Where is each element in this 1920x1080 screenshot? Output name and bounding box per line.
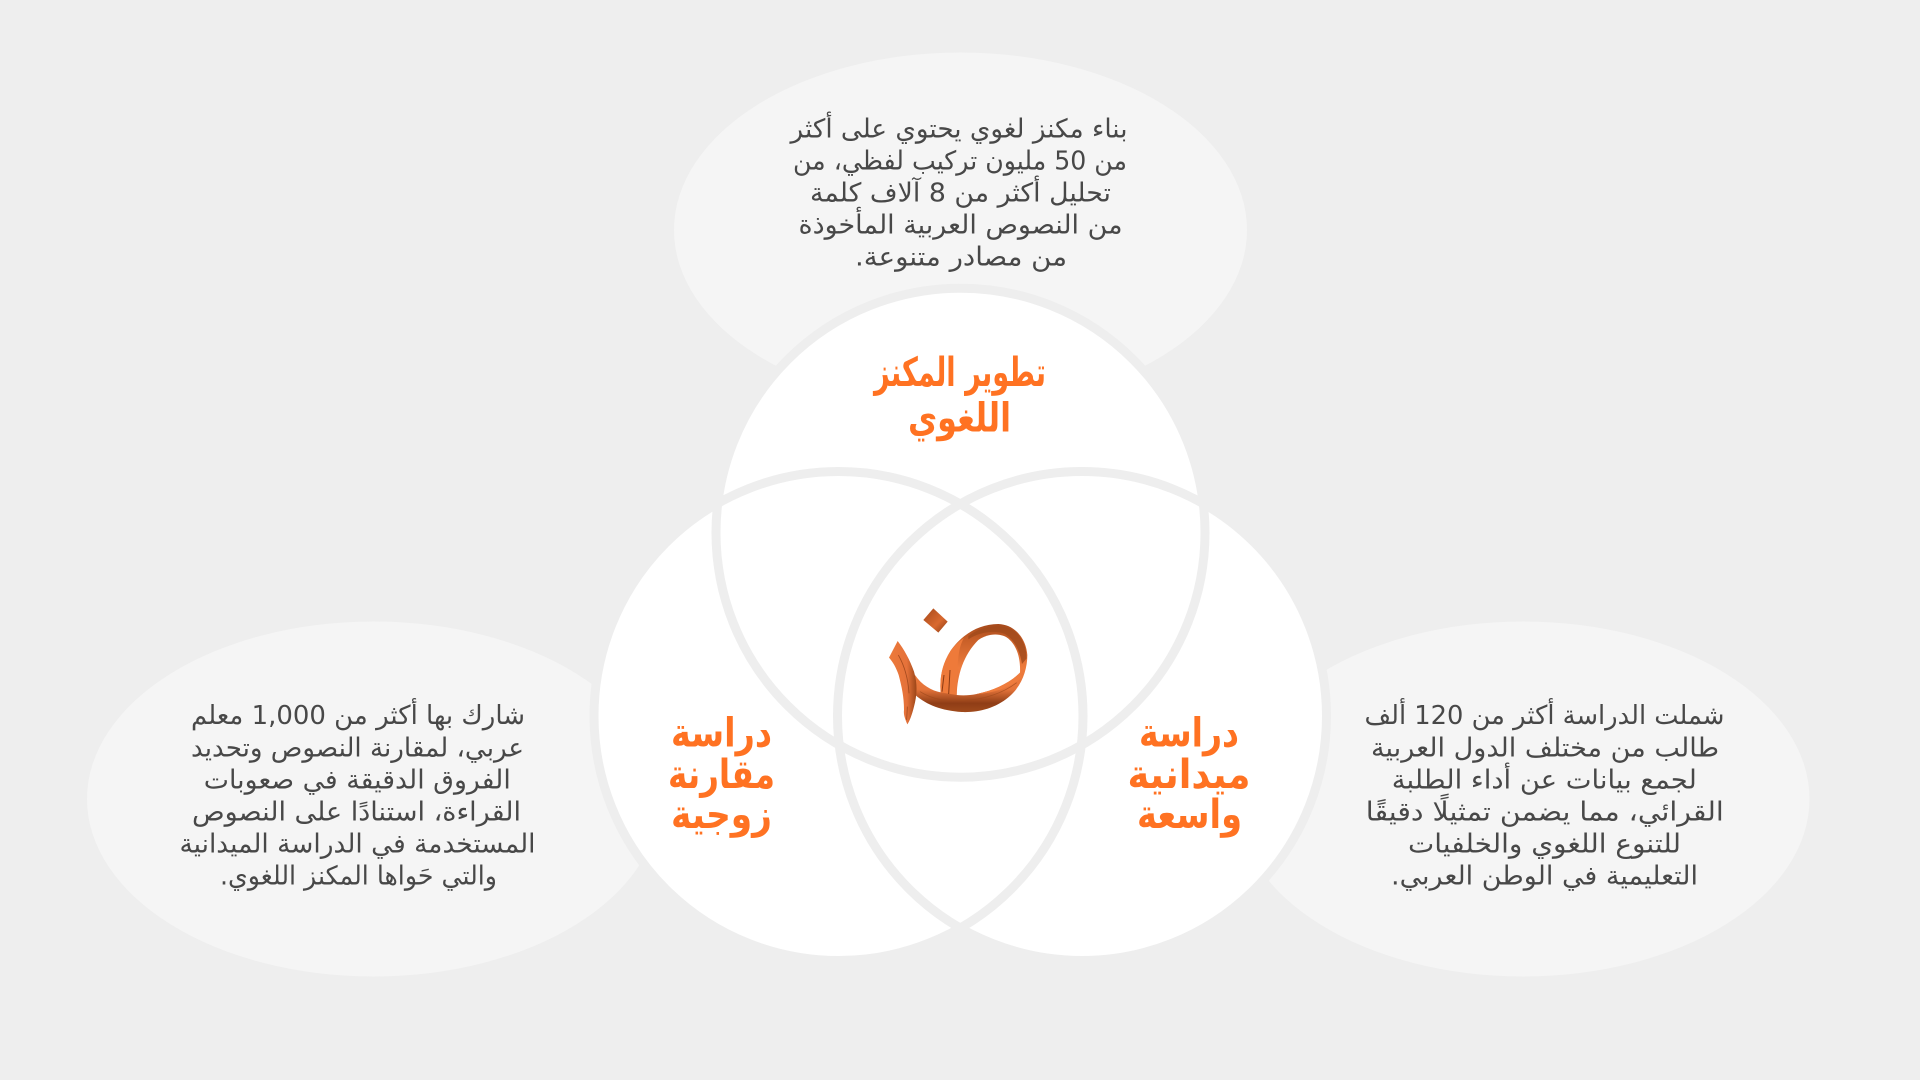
text block: right description: شملت الدراسة أكثر من 120 ألف <box>1364 697 1724 731</box>
heading: left: زوجية <box>671 792 772 838</box>
text block: right description: طالب من مختلف الدول العربية <box>1371 734 1719 764</box>
ellipse: top panel <box>674 52 1247 408</box>
heading: right <box>1128 711 1250 838</box>
text block: top description: من النصوص العربية المأخوذة <box>798 206 1122 240</box>
heading: top: اللغوي <box>908 396 1011 442</box>
heading: left <box>668 711 775 838</box>
heading: left: مقارنة <box>668 752 775 798</box>
text block: left description: شارك بها أكثر من 1,000 معلم <box>191 697 525 731</box>
ellipse: right panel <box>1236 622 1810 976</box>
heading: right: دراسة <box>1139 711 1239 757</box>
text block: right description: لجمع بيانات عن أداء الطلبة <box>1392 762 1697 796</box>
text block: top description <box>788 111 1128 272</box>
text block: right description <box>1364 697 1724 892</box>
text block: top description: تحليل أكثر من 8 آلاف كلمة <box>810 174 1111 208</box>
text block: right description: القرائي، مما يضمن تمثيلًا دقيقًا <box>1366 793 1724 828</box>
heading: left: دراسة <box>671 711 772 757</box>
text block: left description: عربي، لمقارنة النصوص وتحديد <box>191 734 524 764</box>
icon: brush-stroke Arabic letter dad <box>889 608 1027 724</box>
ellipse: left panel <box>87 622 660 976</box>
text block: top description: من مصادر متنوعة. <box>855 242 1067 272</box>
text block: right description: التعليمية في الوطن العربي. <box>1391 862 1698 892</box>
text block: left description: المستخدمة في الدراسة الميدانية <box>180 830 536 860</box>
text block: top description: من 50 مليون تركيب لفظي، من <box>793 146 1127 176</box>
text block: left description <box>180 697 536 892</box>
text block: left description: والتي حَواها المكنز اللغوي. <box>220 862 497 892</box>
heading: top <box>873 350 1046 442</box>
text block: left description: الفروق الدقيقة في صعوبات <box>204 766 511 796</box>
venn diagram <box>594 288 1326 960</box>
heading: right: واسعة <box>1137 792 1242 838</box>
text block: left description: القراءة، استنادًا على النصوص <box>192 798 521 828</box>
text block: right description: للتنوع اللغوي والخلفيات <box>1408 830 1681 860</box>
text block: top description: بناء مكنز لغوي يحتوي على أكثر <box>788 111 1128 145</box>
heading: top: تطوير المكنز <box>873 350 1046 396</box>
heading: right: ميدانية <box>1128 752 1250 798</box>
